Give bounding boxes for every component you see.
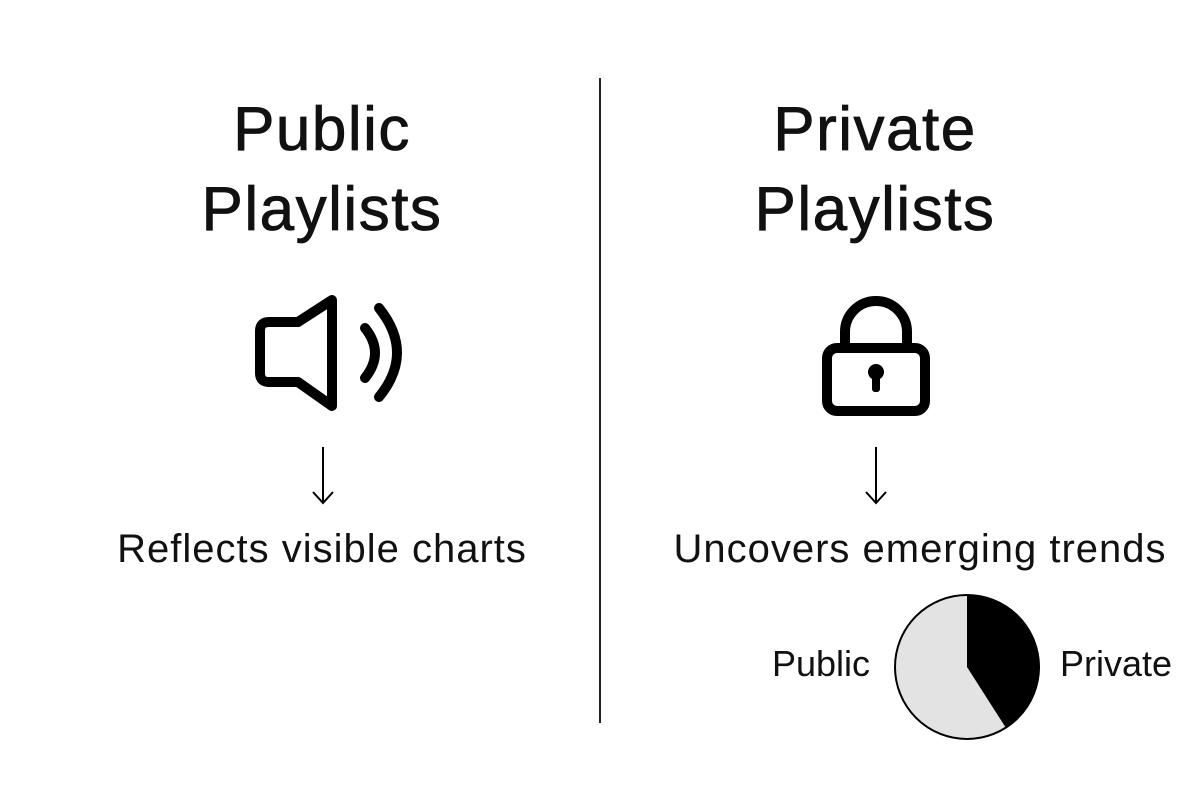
pie chart (772, 594, 1172, 740)
divider (599, 78, 601, 723)
pie chart: Public (772, 643, 870, 684)
arrow: right (865, 447, 887, 504)
icon: lock (822, 296, 930, 416)
title: public playlists: Public (233, 95, 411, 164)
title: private playlists: Playlists (755, 175, 995, 244)
text: reflects visible charts: Reflects visible charts (117, 527, 527, 571)
title: private playlists (755, 95, 995, 244)
arrow: left (312, 447, 334, 504)
pie chart: Private (1060, 643, 1172, 684)
title: public playlists (202, 95, 442, 244)
text: uncovers emerging trends: Uncovers emerging trends (673, 527, 1167, 571)
title: private playlists: Private (773, 95, 977, 164)
icon: speaker (255, 295, 402, 411)
title: public playlists: Playlists (202, 175, 442, 244)
